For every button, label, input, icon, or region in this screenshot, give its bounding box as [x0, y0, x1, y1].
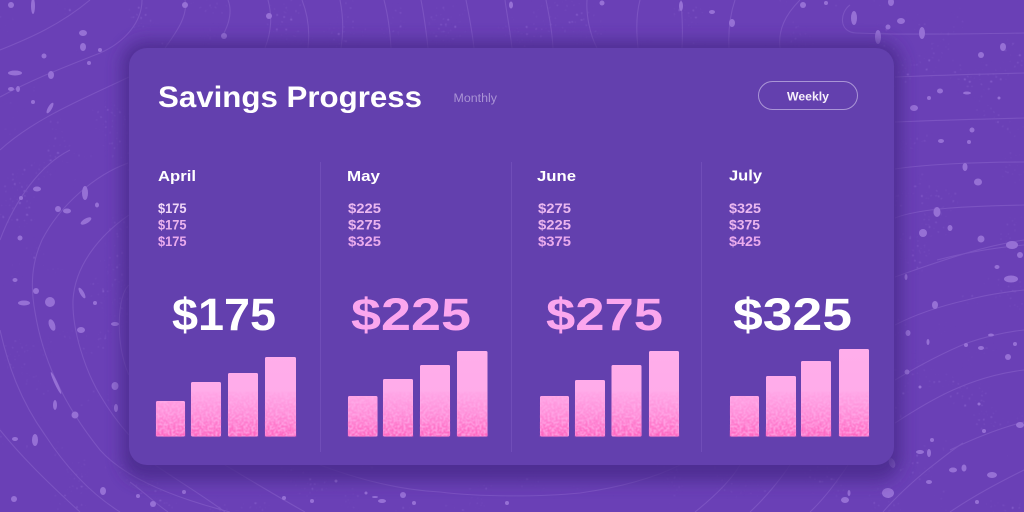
weekly button: Weekly — [787, 92, 830, 104]
month heading: May: May — [347, 168, 381, 185]
month heading: July: July — [729, 168, 763, 184]
April total: $175 — [172, 289, 276, 340]
June amounts — [538, 201, 572, 249]
month heading: June: June — [537, 168, 576, 185]
June bar chart — [540, 351, 679, 436]
May total: $225 — [351, 289, 471, 340]
column: July — [729, 168, 869, 436]
April amounts: $175 — [158, 201, 187, 216]
May amounts: $225 — [348, 201, 382, 216]
July bar chart — [730, 349, 869, 436]
panel: savings card — [129, 48, 894, 465]
June amounts: $225 — [538, 218, 572, 232]
weekly button — [758, 82, 858, 110]
July amounts: $425 — [729, 234, 762, 249]
card shadow — [122, 41, 901, 481]
column: April — [156, 168, 296, 436]
June amounts: $375 — [538, 234, 572, 249]
June total: $275 — [546, 289, 663, 340]
column: May — [347, 168, 488, 436]
May bar chart — [348, 351, 488, 436]
July amounts: $375 — [729, 218, 760, 232]
April bar chart — [156, 357, 296, 436]
monthly label: Monthly — [454, 93, 497, 105]
April amounts: $175 — [158, 218, 187, 232]
April amounts: $175 — [158, 234, 187, 249]
July amounts — [729, 201, 762, 249]
bar grain texture — [156, 392, 869, 436]
April amounts — [158, 201, 187, 249]
June amounts: $275 — [538, 201, 572, 216]
month heading: April: April — [158, 168, 196, 185]
July amounts: $325 — [729, 201, 762, 216]
May amounts: $325 — [348, 234, 382, 249]
May amounts — [348, 201, 382, 249]
May amounts: $275 — [348, 218, 382, 232]
column dividers — [320, 162, 702, 452]
title: Savings Progress — [158, 81, 422, 114]
July total: $325 — [733, 289, 852, 340]
column: June — [537, 168, 679, 436]
